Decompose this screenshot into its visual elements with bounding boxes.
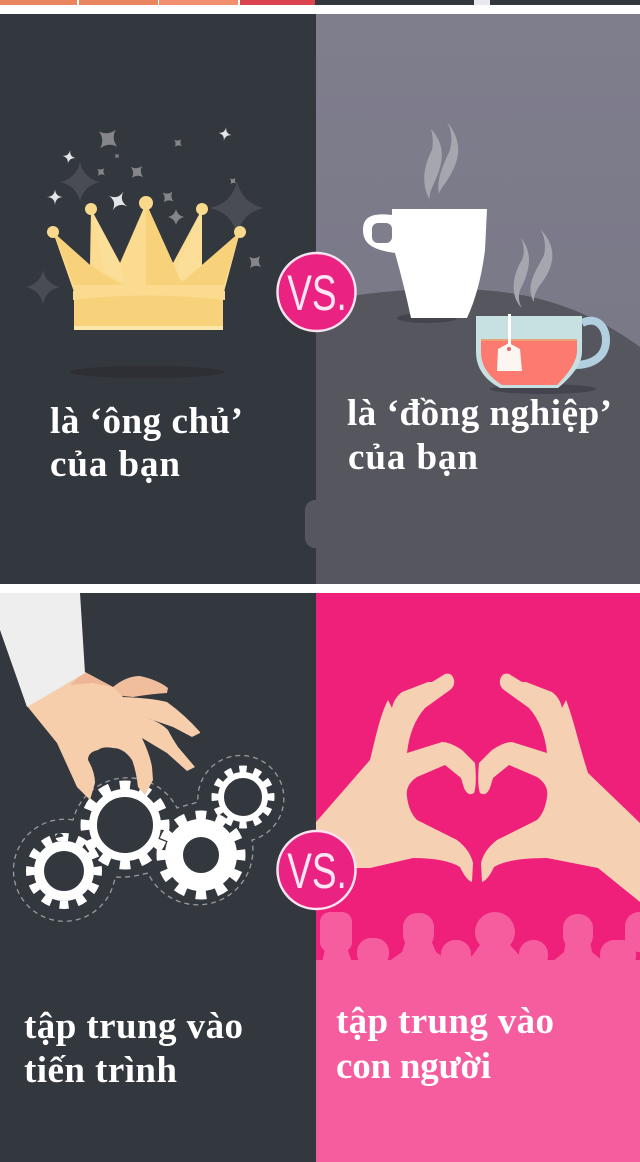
text: colleague: của bạn bbox=[348, 437, 478, 478]
table surface bbox=[316, 289, 640, 584]
text: process: tiến trình bbox=[24, 1050, 177, 1091]
dashed outline bbox=[13, 755, 284, 921]
text: process bbox=[24, 1006, 243, 1091]
tea bag bbox=[508, 314, 511, 348]
sleeve bbox=[0, 593, 85, 707]
icon: glass tea cup with tea bag bbox=[476, 230, 606, 394]
icon: sparkling stars bbox=[26, 122, 266, 304]
badge: VS upper bbox=[278, 253, 356, 331]
steam bbox=[424, 122, 458, 202]
badge: VS upper: VS. bbox=[287, 266, 347, 321]
panel: boss, dark background bbox=[0, 14, 316, 584]
crowd silhouette and lower band bbox=[316, 912, 640, 1162]
icon: hand with white sleeve bbox=[0, 593, 200, 800]
text: people: tập trung vào bbox=[336, 1001, 554, 1042]
text: boss: là ‘ông chủ’ bbox=[50, 401, 243, 442]
text: colleague bbox=[347, 393, 612, 478]
text: boss: của bạn bbox=[50, 444, 180, 485]
icon: white coffee cup bbox=[363, 122, 487, 323]
panel: people, pink background bbox=[316, 593, 640, 1162]
text: colleague: là ‘đồng nghiệp’ bbox=[347, 393, 612, 434]
cup handle bbox=[575, 321, 606, 365]
panel: process, dark background bbox=[0, 593, 316, 1162]
text: people: con người bbox=[336, 1046, 491, 1087]
text: people bbox=[336, 1001, 554, 1087]
badge: VS lower bbox=[278, 831, 356, 909]
gear small right bbox=[212, 766, 274, 828]
text: process: tập trung vào bbox=[24, 1006, 243, 1047]
crown shadow bbox=[69, 366, 225, 378]
gear centre bbox=[80, 780, 170, 870]
gear left bbox=[26, 833, 102, 909]
top strip: previous section remnant bbox=[0, 0, 640, 5]
icon: crown bbox=[47, 196, 246, 378]
text: boss bbox=[50, 401, 243, 485]
icon: gears with dashed outline bbox=[13, 755, 284, 921]
panel: colleague, grey background bbox=[305, 14, 640, 584]
gear large right bbox=[156, 810, 246, 900]
icon: heart hands bbox=[316, 674, 640, 902]
faint rounded shape bbox=[305, 500, 335, 548]
steam bbox=[514, 230, 552, 308]
badge: VS lower: VS. bbox=[287, 844, 347, 899]
